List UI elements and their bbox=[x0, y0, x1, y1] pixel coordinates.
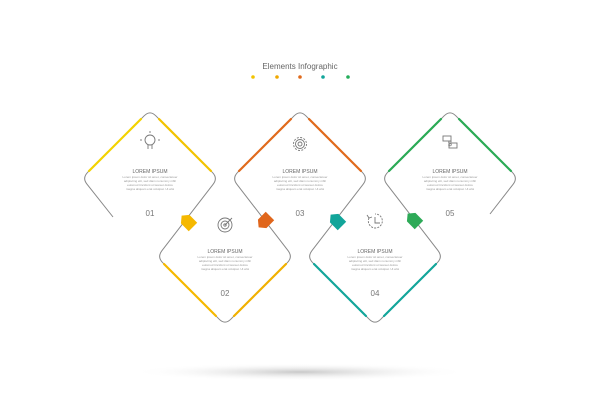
step 01: euismod tincidunt ut laoreet dolore bbox=[127, 183, 173, 187]
step 01: adipiscing elit, sed diam nonummy nibh bbox=[124, 179, 177, 183]
step 03: magna aliquam erat volutpat. Ut wisi bbox=[276, 187, 325, 191]
arrow 2 bbox=[254, 212, 274, 232]
colored segments bbox=[89, 119, 511, 316]
step 02: Lorem ipsum dolor sit amet, consectetuer bbox=[197, 255, 253, 259]
arrow 4 bbox=[403, 209, 423, 229]
arrow 1 bbox=[177, 211, 197, 231]
step 02: 02 bbox=[221, 289, 230, 298]
icon: gear bbox=[294, 138, 306, 150]
step 02: LOREM IPSUM bbox=[207, 249, 243, 255]
icon: bulb bbox=[140, 131, 160, 149]
step 04: LOREM IPSUM bbox=[357, 249, 393, 255]
shadow bbox=[130, 363, 470, 381]
step 05: 05 bbox=[446, 209, 455, 218]
step 04: euismod tincidunt ut laoreet dolore bbox=[352, 263, 398, 267]
step 03: Lorem ipsum dolor sit amet, consectetuer bbox=[272, 175, 328, 179]
step 04: adipiscing elit, sed diam nonummy nibh bbox=[349, 259, 402, 263]
icon: money hands: $ bbox=[448, 141, 452, 148]
step 01: LOREM IPSUM bbox=[132, 169, 168, 175]
step 01: magna aliquam erat volutpat. Ut wisi bbox=[126, 187, 175, 191]
step 03: LOREM IPSUM bbox=[282, 169, 318, 175]
step 02 bbox=[197, 218, 253, 298]
step 03: euismod tincidunt ut laoreet dolore bbox=[277, 183, 323, 187]
step 04: Lorem ipsum dolor sit amet, consectetuer bbox=[347, 255, 403, 259]
step 03 bbox=[272, 138, 328, 218]
step 05 bbox=[422, 136, 478, 218]
step 05: euismod tincidunt ut laoreet dolore bbox=[427, 183, 473, 187]
step 05: Lorem ipsum dolor sit amet, consectetuer bbox=[422, 175, 478, 179]
step 02: adipiscing elit, sed diam nonummy nibh bbox=[199, 259, 252, 263]
step 03: 03 bbox=[296, 209, 305, 218]
step 03: adipiscing elit, sed diam nonummy nibh bbox=[274, 179, 327, 183]
step 01 bbox=[122, 131, 178, 218]
step 01: Lorem ipsum dolor sit amet, consectetuer bbox=[122, 175, 178, 179]
snake outline bbox=[85, 113, 515, 322]
icon: target bbox=[218, 218, 232, 232]
step 04: 04 bbox=[371, 289, 380, 298]
icon: clock bbox=[367, 214, 382, 228]
step 02: magna aliquam erat volutpat. Ut wisi bbox=[201, 267, 250, 271]
step 05: magna aliquam erat volutpat. Ut wisi bbox=[426, 187, 475, 191]
step 04: magna aliquam erat volutpat. Ut wisi bbox=[351, 267, 400, 271]
step 05: adipiscing elit, sed diam nonummy nibh bbox=[424, 179, 477, 183]
step 05: LOREM IPSUM bbox=[432, 169, 468, 175]
step 04 bbox=[347, 214, 403, 298]
title: Elements Infographic bbox=[262, 62, 338, 71]
arrow 3 bbox=[326, 210, 346, 230]
step 01: 01 bbox=[146, 209, 155, 218]
step 02: euismod tincidunt ut laoreet dolore bbox=[202, 263, 248, 267]
title bbox=[251, 62, 350, 79]
